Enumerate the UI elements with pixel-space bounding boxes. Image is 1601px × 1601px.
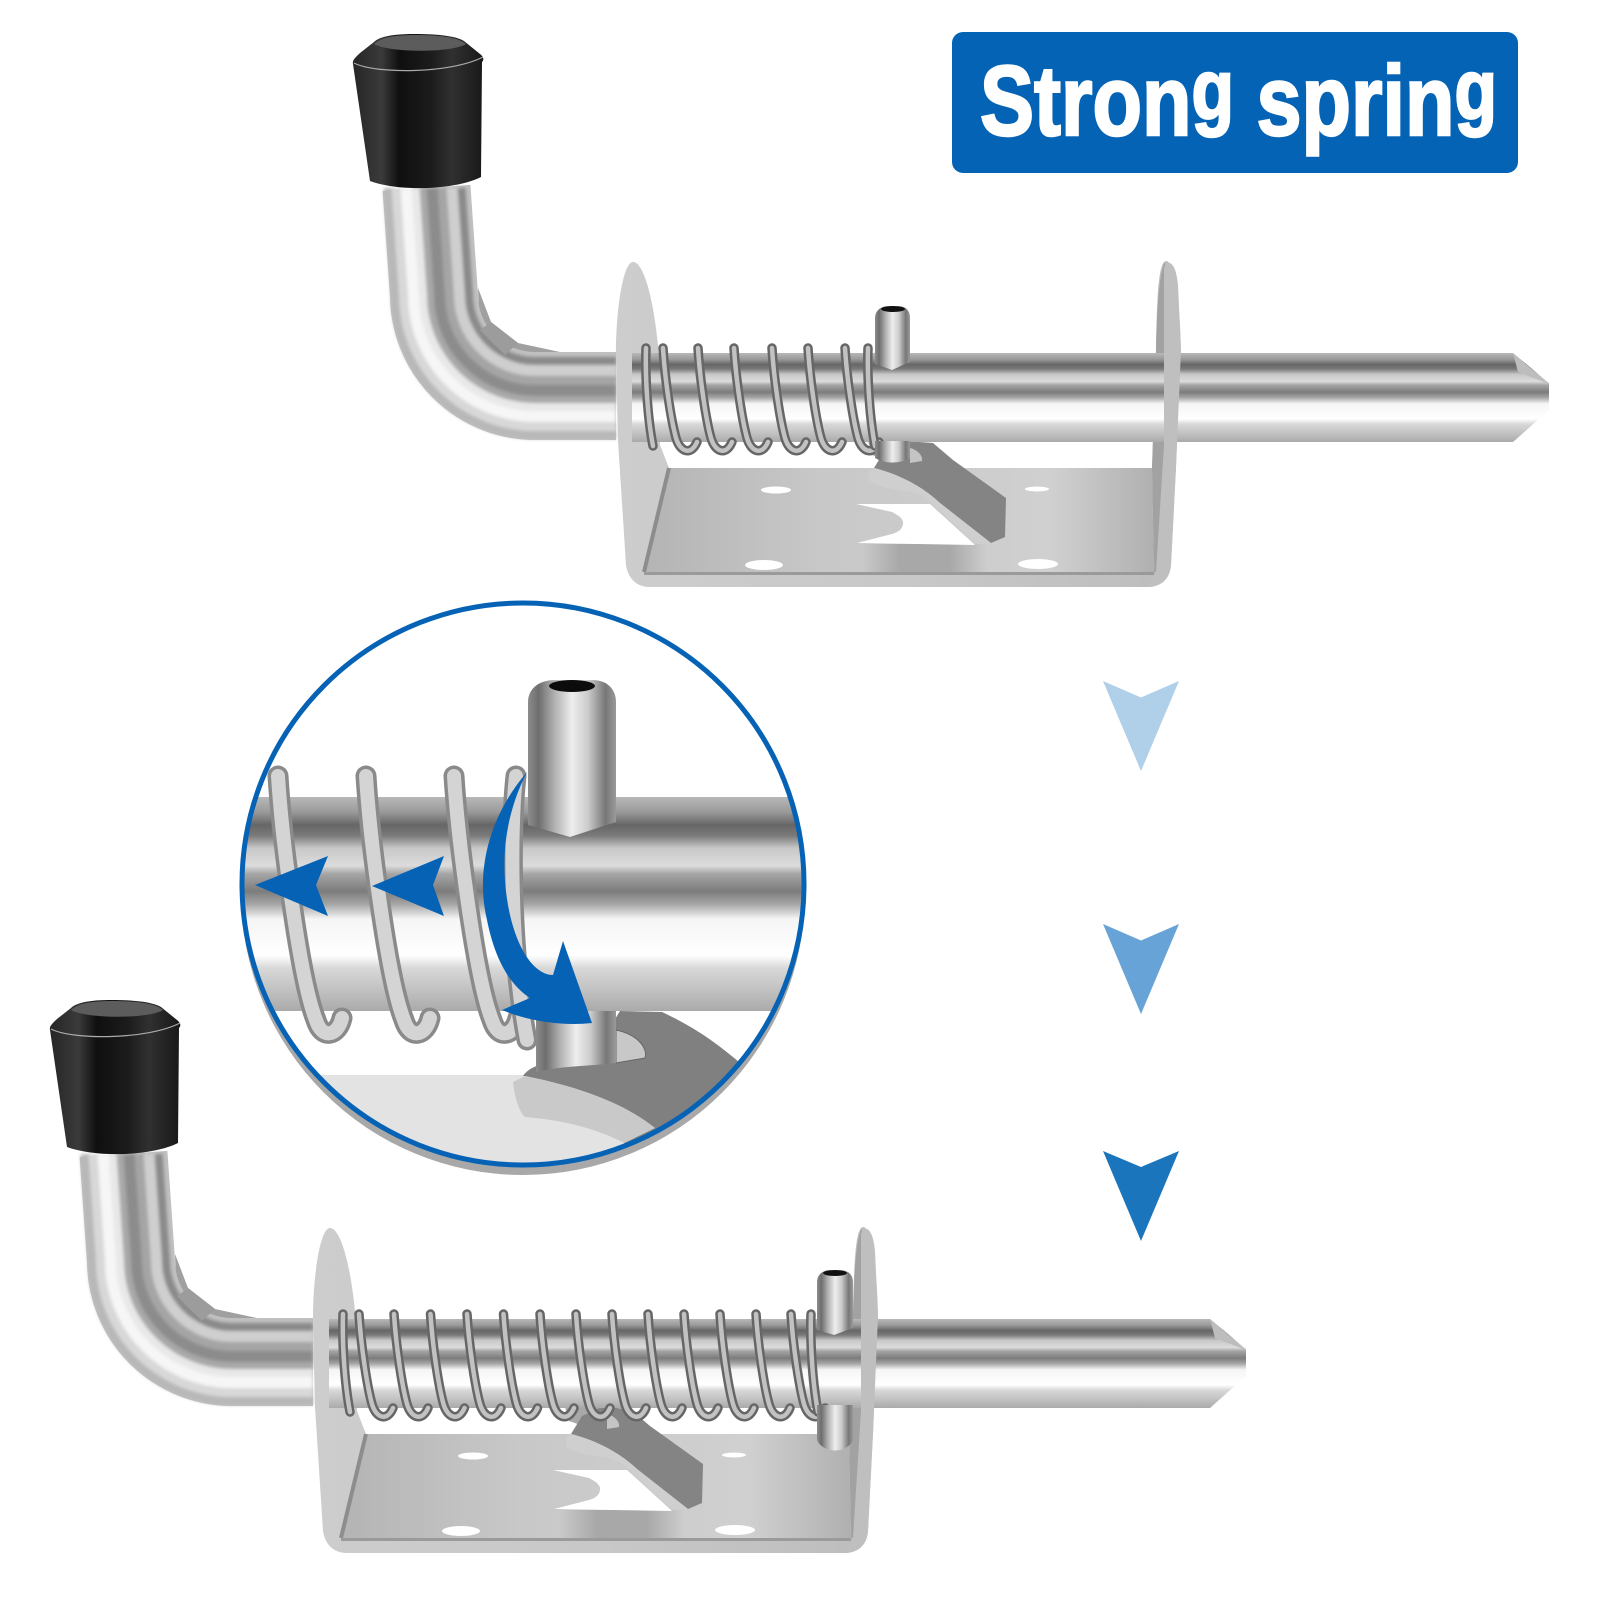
title badge: Strong spring: g [1455,43,1497,138]
magnified detail circle [235,603,815,1185]
circle outline [242,603,804,1165]
arrow: spring direction 2 [372,856,444,916]
title badge: Strong spring [952,32,1518,173]
handle with black rubber knob [353,34,616,434]
bracket, lever and rod [616,261,1549,587]
arrow: medium blue chevron [1103,924,1179,1014]
circle shadow [241,611,805,1175]
bottom latch: spring extended, pin released [50,1000,1246,1553]
cross pin [875,306,910,462]
compressed spring [646,348,879,451]
title badge: Strong spring: g [1191,43,1234,138]
handle with black rubber knob [50,1000,313,1400]
arrow: curved rotate pin [483,772,592,1024]
bracket, lever and rod [313,1227,1246,1553]
top latch: spring relaxed, pin locked out [353,34,1549,587]
magnified mechanism [235,680,815,1185]
arrow: spring direction 1 [255,856,328,916]
arrow: light blue chevron [1103,681,1179,771]
arrow: dark blue chevron [1103,1151,1179,1241]
extended spring [343,1314,825,1417]
title badge: Strong spring: Stron [980,45,1238,156]
cross pin [817,1270,853,1450]
title badge: Strong spring: sprin [1234,45,1455,156]
